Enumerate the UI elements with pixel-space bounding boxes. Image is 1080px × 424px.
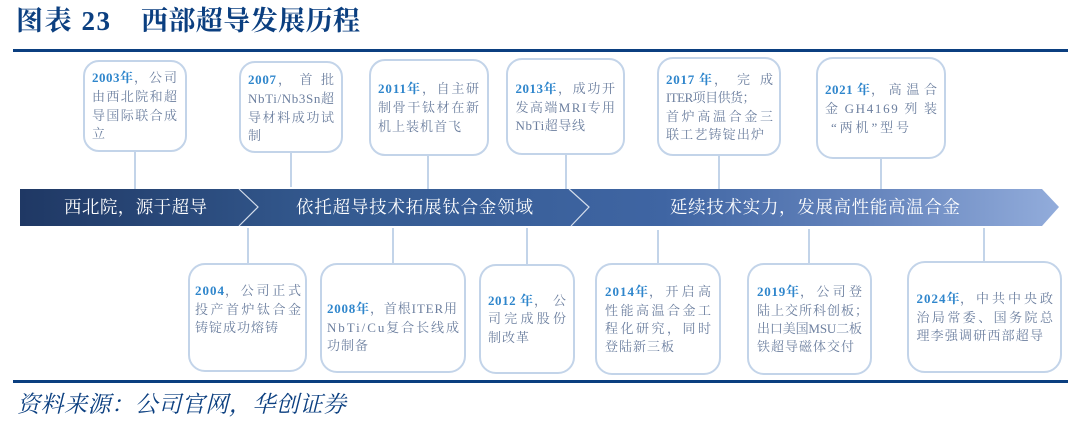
card: 2021 [817, 58, 945, 158]
card: 2008 [321, 264, 465, 372]
card: 2012: 司完成股份 [488, 311, 566, 326]
card: 2003: 导国际联合成 [92, 108, 177, 123]
card: 2003: 立 [92, 126, 105, 141]
card: 2007: NbTi/Nb3Sn超 [248, 91, 334, 106]
card: 2003: 2003年 [92, 70, 133, 85]
card: 2024: ，中共中央政 [960, 291, 1053, 307]
card: 2021: 2021 年 [825, 82, 870, 97]
card: 2019 [748, 264, 871, 374]
card: 2017: 首炉高温合金三 [666, 109, 773, 124]
card: 2013: 2013年 [516, 81, 556, 96]
card: 2017: ，完成 [714, 72, 773, 88]
card: 2024: 2024年 [916, 291, 960, 306]
card: 2013: NbTi超导线 [516, 118, 585, 133]
card: 2019: 陆上交所科创板； [757, 303, 868, 318]
card: 2017: 联工艺铸锭出炉 [666, 127, 764, 142]
chevron divider 2 [569, 189, 589, 226]
card: 2024: 理李强调研西部超导 [916, 328, 1043, 343]
card: 2012: 制改革 [488, 330, 529, 345]
card: 2017 [658, 58, 780, 155]
card: 2004: 2004 [195, 283, 224, 298]
card: 2017: 2017 年 [666, 72, 712, 87]
card: 2011 [370, 60, 488, 155]
card: 2012: ，公 [534, 293, 566, 309]
phase label 2: 依托超导技术拓展钛合金领域 [296, 197, 534, 217]
card: 2019: 铁超导磁体交付 [757, 339, 854, 354]
chevron divider 1 [239, 189, 258, 226]
phase label 1: 西北院，源于超导 [64, 197, 207, 217]
card: 2013: ，成功开 [558, 81, 615, 97]
card: 2003 [84, 61, 186, 151]
card: 2014: 2014年 [605, 284, 648, 299]
card: 2007: 2007 [248, 72, 276, 87]
card: 2014: ，开启高 [649, 284, 711, 300]
card: 2024: 治局常委、国务院总 [916, 310, 1054, 325]
card: 2021: 金 GH4169 列 装 [825, 101, 937, 116]
card: 2012: 2012 年 [488, 293, 533, 308]
card: 2007: 制 [248, 128, 261, 143]
card: 2011: ，自主研 [422, 81, 479, 97]
title: 西部超导发展历程 [141, 6, 360, 36]
card: 2008: 2008年 [327, 301, 369, 316]
card: 2003: 由西北院和超 [92, 89, 177, 104]
card: 2011: 机上装机首飞 [378, 119, 461, 134]
connector lines [135, 151, 984, 264]
card: 2008: NbTi/Cu复合长线成 [327, 320, 459, 335]
card: 2008: ，首根ITER用 [370, 301, 457, 317]
card: 2003: ，公司 [134, 70, 177, 86]
card: 2004 [189, 264, 306, 371]
card: 2013 [507, 59, 624, 154]
card: 2007: ，首批 [278, 72, 334, 88]
phase label 3: 延续技术实力，发展高性能高温合金 [670, 197, 960, 217]
card: 2011: 2011年 [378, 81, 420, 96]
card: 2019: 出口美国MSU二板 [757, 321, 862, 336]
source note: 资料来源：公司官网，华创证券 [17, 392, 348, 417]
card: 2019: 2019年 [757, 284, 799, 299]
card: 2017: ITER项目供货； [666, 90, 756, 105]
card: 2007: 导材料成功试 [248, 110, 334, 125]
card: 2004: 投产首炉钛合金 [195, 302, 301, 317]
title [16, 5, 360, 36]
card: 2007 [240, 62, 342, 152]
timeline arrow bar [20, 189, 1059, 226]
card: 2019: ，公司登 [800, 284, 862, 300]
card: 2011: 制骨干钛材在新 [378, 100, 479, 115]
card: 2014: 程化研究，同时 [605, 321, 711, 337]
card: 2021: ，高温合 [871, 82, 937, 98]
card: 2013: 发高端MRI专用 [516, 100, 615, 115]
card: 2021: “两机”型号 [831, 120, 909, 135]
card: 2004: 铸锭成功熔铸 [195, 320, 278, 335]
card: 2014 [596, 264, 720, 374]
title: 图表 23 [16, 5, 110, 36]
card: 2024 [908, 262, 1061, 372]
card: 2014: 性能高温合金工 [605, 303, 711, 318]
card: 2014: 登陆新三板 [605, 339, 674, 354]
card: 2012 [480, 265, 574, 373]
card: 2008: 功制备 [327, 338, 368, 353]
card: 2004: ，公司正式 [225, 283, 301, 299]
